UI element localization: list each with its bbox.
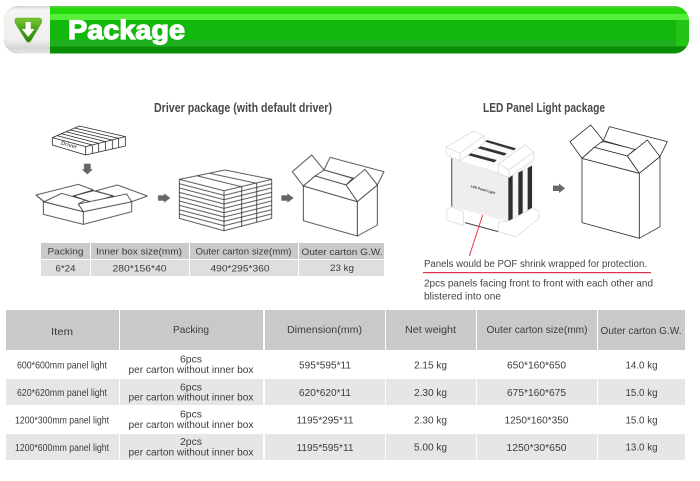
table row: 1200*600: per carton without inner box xyxy=(128,448,254,458)
corner protector: top right xyxy=(498,145,534,177)
table header row: Dimension(mm) xyxy=(287,324,362,336)
heading: driver package: Driver package (with default driver) xyxy=(154,101,332,115)
table header row: Net weight xyxy=(405,324,456,336)
note: panels facing: 2pcs panels facing front to front with each other and xyxy=(424,278,653,290)
table header row xyxy=(51,324,682,338)
table row: 1200*300: 1250*160*350 xyxy=(504,416,569,426)
table row: 620*620: 675*160*675 xyxy=(507,388,566,399)
illustration: panel outer carton xyxy=(570,125,667,238)
LED panel illustrations xyxy=(446,125,667,256)
arrow: box to stack xyxy=(158,193,170,203)
table row: 1200*600: 5.00 kg xyxy=(414,442,447,454)
table row: 620*620: 620*620*11 xyxy=(299,388,351,399)
corner protector: bottom left xyxy=(447,207,463,226)
table row: 1200*600: 1195*595*11 xyxy=(296,443,354,454)
table row: 1200*600: 13.0 kg xyxy=(626,442,658,454)
driver table text: Outer carton G.W. xyxy=(302,247,382,258)
table row: 600*600 xyxy=(17,354,658,376)
panel top bars xyxy=(465,140,516,162)
illustration: wrapped panels: LED Panel Light xyxy=(470,184,497,195)
driver table text: 6*24 xyxy=(56,264,76,274)
banner title: Package xyxy=(68,15,185,45)
table header row: Packing xyxy=(173,324,209,336)
table row: 1200*600: 1200*600mm panel light xyxy=(15,442,109,454)
table row: 1200*300: per carton without inner box xyxy=(128,420,254,431)
driver table text: Inner box size(mm) xyxy=(96,246,182,258)
table row: 600*600: 600*600mm panel light xyxy=(17,360,107,372)
table row: 600*600: 650*160*650 xyxy=(507,360,566,372)
illustration: outer carton xyxy=(292,155,384,236)
note: panels facing: blistered into one xyxy=(424,290,501,302)
driver table text xyxy=(48,246,382,274)
table row: 600*600: 2.15 kg xyxy=(414,360,447,372)
arrow: tray into box xyxy=(82,164,93,174)
table row: 620*620: 15.0 kg xyxy=(626,388,658,399)
banner green bar xyxy=(4,6,689,54)
banner download icon xyxy=(15,18,42,42)
driver table text: Packing xyxy=(48,246,84,258)
product table xyxy=(6,310,685,460)
driver table cell backgrounds xyxy=(41,243,384,276)
note: panels facing xyxy=(424,278,653,302)
table row: 620*620: 620*620mm panel light xyxy=(17,387,107,399)
table header row: Outer carton size(mm) xyxy=(486,324,588,336)
table row: 600*600: per carton without inner box xyxy=(128,365,254,376)
table row: 620*620 xyxy=(17,382,658,404)
arrow: panels to carton xyxy=(553,184,565,193)
illustration: driver tray: Driver xyxy=(60,141,78,151)
driver table text: 23 kg xyxy=(330,263,354,274)
driver table text: Outer carton size(mm) xyxy=(196,246,292,258)
red underline xyxy=(423,272,651,273)
table row: 1200*300: 2.30 kg xyxy=(414,416,447,426)
illustration: wrapped panels xyxy=(446,131,539,237)
panel side bars xyxy=(508,166,532,221)
arrow: stack to carton xyxy=(281,193,294,203)
table row: 1200*600: 1250*30*650 xyxy=(506,443,567,454)
driver table text: 490*295*360 xyxy=(210,264,270,274)
table backgrounds xyxy=(6,310,685,460)
table row: 1200*600: 2pcs xyxy=(180,437,202,448)
heading: LED panel light package: LED Panel Light package xyxy=(483,101,605,115)
illustration: driver tray xyxy=(52,126,125,155)
table header row: Item xyxy=(51,326,73,338)
table row: 1200*300: 1195*295*11 xyxy=(296,416,354,426)
header banner xyxy=(4,6,689,54)
table row: 620*620: per carton without inner box xyxy=(128,392,254,404)
table row: 620*620: 2.30 kg xyxy=(414,388,447,399)
table header row: Outer carton G.W. xyxy=(600,325,682,337)
table row: 1200*300: 15.0 kg xyxy=(626,416,658,426)
illustration: stacked boxes xyxy=(179,170,272,231)
red pointer line xyxy=(469,215,483,256)
table row: 1200*300 xyxy=(15,410,658,431)
corner protector: top left xyxy=(446,131,484,161)
driver package illustrations xyxy=(36,126,384,236)
note: shrink wrap: Panels would be POF shrink wrapped for protection. xyxy=(424,259,647,270)
table row: 1200*300: 6pcs xyxy=(180,410,202,420)
table row: 600*600: 14.0 kg xyxy=(626,360,658,372)
driver spec table xyxy=(41,243,384,276)
table row: 1200*300: 1200*300mm panel light xyxy=(15,414,109,426)
illustration: open inner box xyxy=(36,184,147,224)
table row: 620*620: 6pcs xyxy=(180,382,202,394)
corner protector: bottom right xyxy=(498,208,539,237)
table row: 600*600: 595*595*11 xyxy=(299,360,351,372)
table row: 600*600: 6pcs xyxy=(180,354,202,366)
driver table text: 280*156*40 xyxy=(112,264,166,274)
table row: 1200*600 xyxy=(15,437,658,458)
